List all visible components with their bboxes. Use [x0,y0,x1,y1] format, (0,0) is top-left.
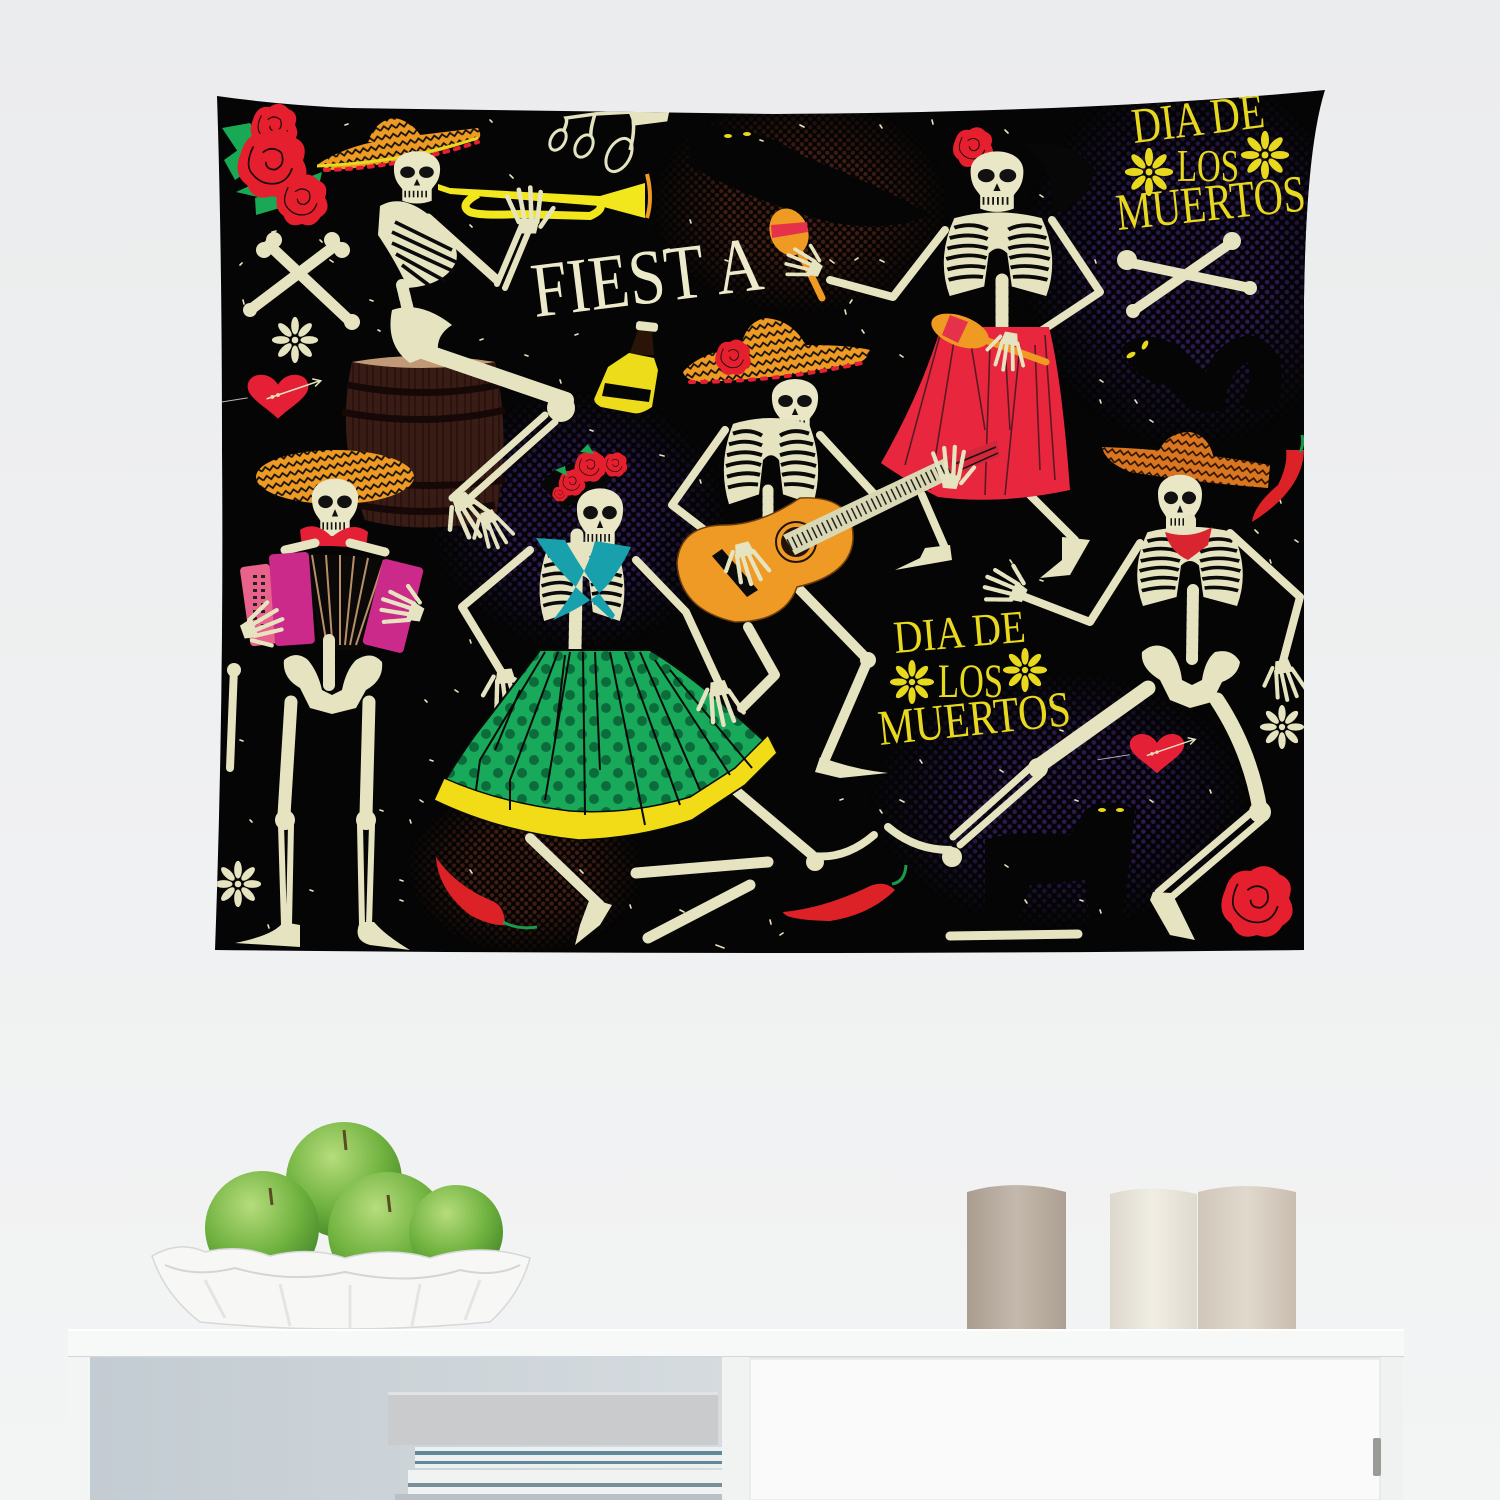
text: DIA DE LOS MUERTOS top right: MUERTOS [1113,165,1308,242]
black cat: lower [985,802,1135,930]
pelvis: bandana skeleton [1142,645,1240,708]
skeleton: dancer in red dress [763,127,1100,578]
daisy: right [1260,705,1304,749]
rib cage: bandana skeleton [1137,527,1243,606]
crossed bones: left [243,232,360,330]
divider [722,1357,749,1500]
speckles [240,120,1298,948]
hair [1020,143,1095,215]
scarf: dancer [536,538,631,620]
dress: green [434,650,777,840]
barrel [342,356,505,528]
rose: hair [953,127,993,167]
brown halftone: lower left [414,811,635,948]
skull: trumpet player [394,151,440,204]
purple halftone: centre [440,399,721,642]
rib cage: red dress [944,212,1052,296]
hat: trumpet player [317,118,480,170]
pelvis: trumpet player [390,307,452,363]
black cat silhouette: top [690,125,930,226]
guitar [677,440,1000,622]
skull: dancer [577,488,623,549]
bow tie [300,526,368,548]
spine: red dress [996,280,1008,326]
daisy: lower left [215,861,261,907]
bowl [152,1247,530,1329]
arms: bandana skeleton [1020,533,1300,665]
music notes [546,110,668,176]
legs: bandana skeleton [888,688,1271,940]
heart with arrow: left [212,375,321,419]
skeleton: dancer with bandana [888,432,1307,940]
text: DIA DE LOS MUERTOS centre: LOS [938,655,1003,708]
maraca: raised [763,203,822,298]
accordion [240,552,424,654]
spine: accordion player [323,640,335,685]
skull: accordion player [312,479,358,536]
spine: guitar player [762,490,774,525]
title: FIESTA: FIEST A [526,219,767,334]
black cat: right [1120,335,1282,412]
legs: dancer [530,790,812,905]
trumpet [438,174,650,218]
text: DIA DE LOS MUERTOS top right: LOS [1177,140,1239,191]
daisy: left [272,317,318,363]
arms: red dress [830,220,1100,345]
tapestry panel [200,70,1360,960]
bandana [1165,527,1212,560]
lone bone: left [227,663,241,768]
skeleton: guitar player [672,318,1000,778]
chili pepper: lower left [436,857,537,928]
hat: accordion player [256,450,414,504]
pelvis: accordion player [284,655,382,714]
cat eyes: lower [1098,808,1124,812]
maraca: lower [927,307,1046,362]
rib cage: trumpet player [378,201,457,288]
candles [967,1185,1296,1332]
chili pepper: lower centre [783,865,906,921]
purple halftone: lower right [882,678,1238,922]
bowl of apples [152,1122,530,1329]
open compartment [90,1357,722,1500]
leg: trumpet player [420,350,566,400]
skeleton: accordion player [235,450,430,950]
shelf unit [68,1329,1404,1500]
cat eyes: right [1125,339,1150,360]
hair and flowers [540,444,627,510]
legs: guitar player [742,590,868,757]
legs: accordion player [235,702,410,950]
skull: bandana skeleton [1158,475,1202,532]
text: DIA DE LOS MUERTOS centre [875,601,1073,756]
purple halftone: upper right [1034,98,1313,438]
right post [1380,1357,1403,1500]
apples [205,1122,503,1292]
bone: bottom right [950,934,1078,936]
hat: guitar player [683,318,870,382]
skull: guitar player [772,379,818,434]
text: DIA DE LOS MUERTOS centre: DIA DE [891,601,1027,663]
arms: guitar player [672,430,945,565]
hinge [1373,1438,1381,1476]
roses and leaves: top left [222,104,328,225]
arm: trumpet player [428,218,497,280]
rose: lower right [1221,866,1293,937]
shelf top [68,1329,1404,1357]
text: DIA DE LOS MUERTOS centre: MUERTOS [875,680,1073,756]
drawer door [750,1359,1380,1500]
skeleton: dancer in green dress [434,444,874,945]
hat: bandana skeleton [1102,432,1270,488]
spine: bandana skeleton [1190,520,1193,660]
rib cage: guitar player [724,418,818,504]
brown halftone: upper centre [662,113,938,306]
bottle [594,321,658,413]
spine: dancer [575,535,577,650]
bones: lower centre [636,862,768,938]
skeleton: trumpet player on barrel [317,118,650,554]
arms: dancer [462,550,722,690]
skull: red dress [971,151,1023,212]
hands: accordion player [240,600,284,648]
chili pepper: right [1252,435,1304,522]
books [388,1392,722,1500]
skirt: red [881,327,1070,500]
left post [68,1357,90,1500]
text: DIA DE LOS MUERTOS top right: DIA DE [1129,82,1267,154]
spine: trumpet player [402,285,408,310]
cat eyes: top [724,132,751,138]
legs: red dress [922,495,1075,548]
text: DIA DE LOS MUERTOS top right [1113,82,1308,242]
crossed bones: right [1117,232,1257,318]
rib cage: dancer [540,542,624,621]
heart with arrow: right [1098,734,1195,773]
